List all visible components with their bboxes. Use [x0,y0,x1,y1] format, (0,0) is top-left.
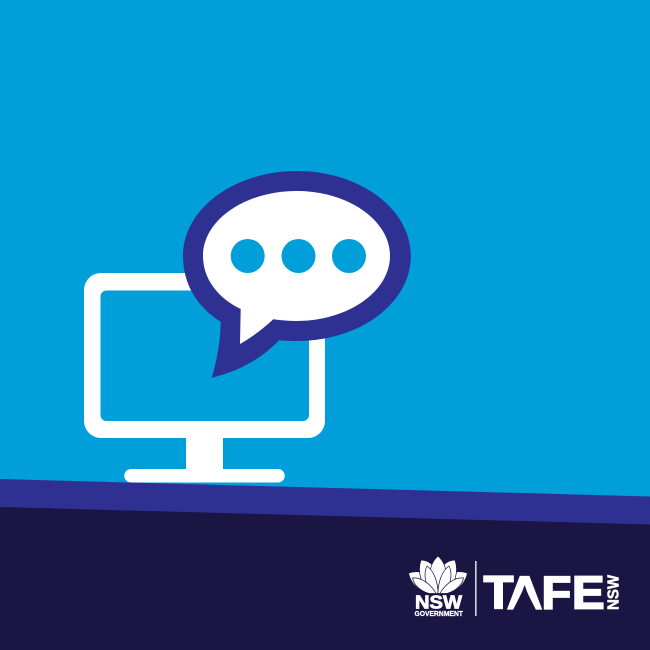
wordmark: NSW: NSW [415,591,462,612]
typing dot 2 [282,239,316,273]
typing dot 1 [231,239,265,273]
wordmark: GOVERNMENT: GOVERNMENT [414,609,463,618]
wordmark: TAFE: TAFE [484,568,604,619]
logo: NSW Government [408,556,468,618]
bubble outline [183,171,411,378]
logo: TAFE NSW [484,568,622,619]
bubble fill [203,191,390,344]
dark footer band [0,507,650,650]
icon: waratah flower [408,556,468,594]
icon: computer monitor [84,273,325,482]
purple diagonal band [0,479,650,526]
logo divider [475,561,476,616]
chevron cut-out of the letter A [512,587,536,611]
icon: speech bubble [183,171,411,378]
typing dot 3 [332,239,366,273]
wordmark: NSW vertical: NSW [606,575,622,610]
